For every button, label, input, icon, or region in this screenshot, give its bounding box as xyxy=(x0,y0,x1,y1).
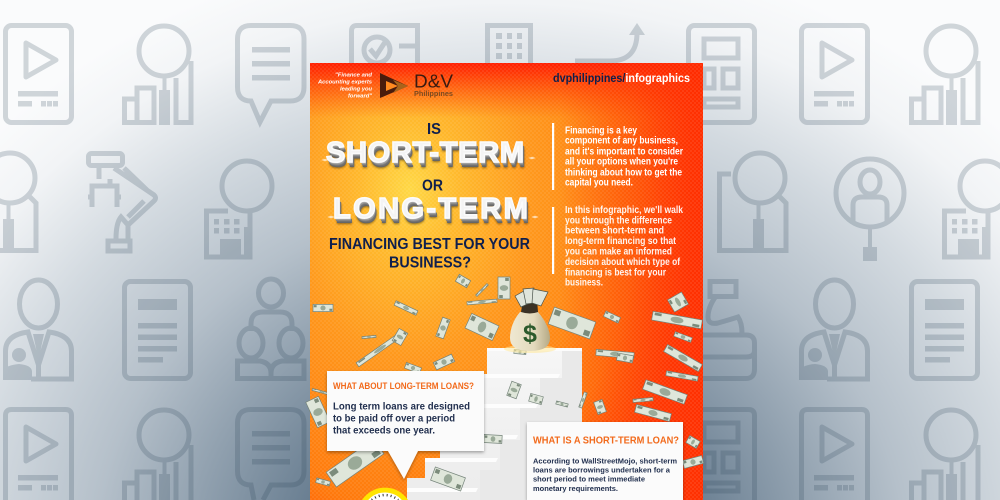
tagline xyxy=(317,73,373,99)
title sparkles xyxy=(321,156,539,218)
intro text block one: Financing is a key xyxy=(565,124,637,136)
callout: short-term loan: short period to meet immediate xyxy=(533,475,645,484)
callout: long-term loans xyxy=(327,371,484,479)
tagline: Accounting experts xyxy=(317,80,372,86)
intro text block two: between short-term and xyxy=(565,225,664,237)
intro text block one: and it's important to consider xyxy=(565,145,683,157)
intro divider bars xyxy=(552,123,554,274)
white staircase xyxy=(407,348,582,500)
logo: D&V xyxy=(414,71,453,91)
intro text block one: thinking about how to get the xyxy=(565,166,682,178)
site link: dvphilippines/infographics xyxy=(553,73,690,85)
callout: long-term loans: to be paid off over a period xyxy=(333,412,455,424)
intro text block two: decision about which type of xyxy=(565,256,680,268)
callout: short-term loan: monetary requirements. xyxy=(533,484,618,493)
intro text block one: capital you need. xyxy=(565,177,633,189)
intro text block two: financing is best for your xyxy=(565,266,666,278)
tagline: forward" xyxy=(348,93,372,99)
title small words: IS xyxy=(427,121,441,138)
panel background xyxy=(310,63,703,500)
title small words: FINANCING BEST FOR YOUR xyxy=(329,236,530,253)
money bag: $ xyxy=(523,320,537,348)
title small words: OR xyxy=(422,178,443,194)
callout: short-term loan xyxy=(527,422,683,500)
intro text block two: you through the difference xyxy=(565,214,672,226)
clock xyxy=(362,488,408,500)
tagline: "Finance and xyxy=(335,73,373,79)
money bag xyxy=(504,288,556,353)
intro text block one: all your options when you're xyxy=(565,156,678,168)
flying dollar bills xyxy=(306,274,704,491)
callout: short-term loan: WHAT IS A SHORT-TERM LOAN? xyxy=(533,435,679,446)
logo xyxy=(380,71,453,98)
title: long-term: LONG-TERM xyxy=(333,193,530,225)
title: short-term: SHORT-TERM xyxy=(326,137,525,169)
intro text block one xyxy=(565,124,683,189)
intro text block two xyxy=(565,204,683,289)
callout: long-term loans: Long term loans are designed xyxy=(333,401,470,413)
intro text block two: In this infographic, we'll walk xyxy=(565,204,683,216)
intro text block two: long-term financing so that xyxy=(565,235,676,247)
title small words: BUSINESS? xyxy=(389,254,471,272)
title small words xyxy=(329,121,530,272)
intro text block two: you can make an informed xyxy=(565,245,672,257)
callout: long-term loans: WHAT ABOUT LONG-TERM LOANS? xyxy=(333,381,474,391)
logo: Philippines xyxy=(414,91,453,98)
callout: long-term loans: that exceeds one year. xyxy=(333,424,435,436)
intro text block two: business. xyxy=(565,277,603,289)
callout: short-term loan: loans are borrowings undertaken for a xyxy=(533,465,671,474)
intro text block one: component of any business, xyxy=(565,135,678,147)
callout: short-term loan: According to WallStreetMojo, short-term xyxy=(533,456,677,465)
tagline: leading you xyxy=(340,87,373,93)
